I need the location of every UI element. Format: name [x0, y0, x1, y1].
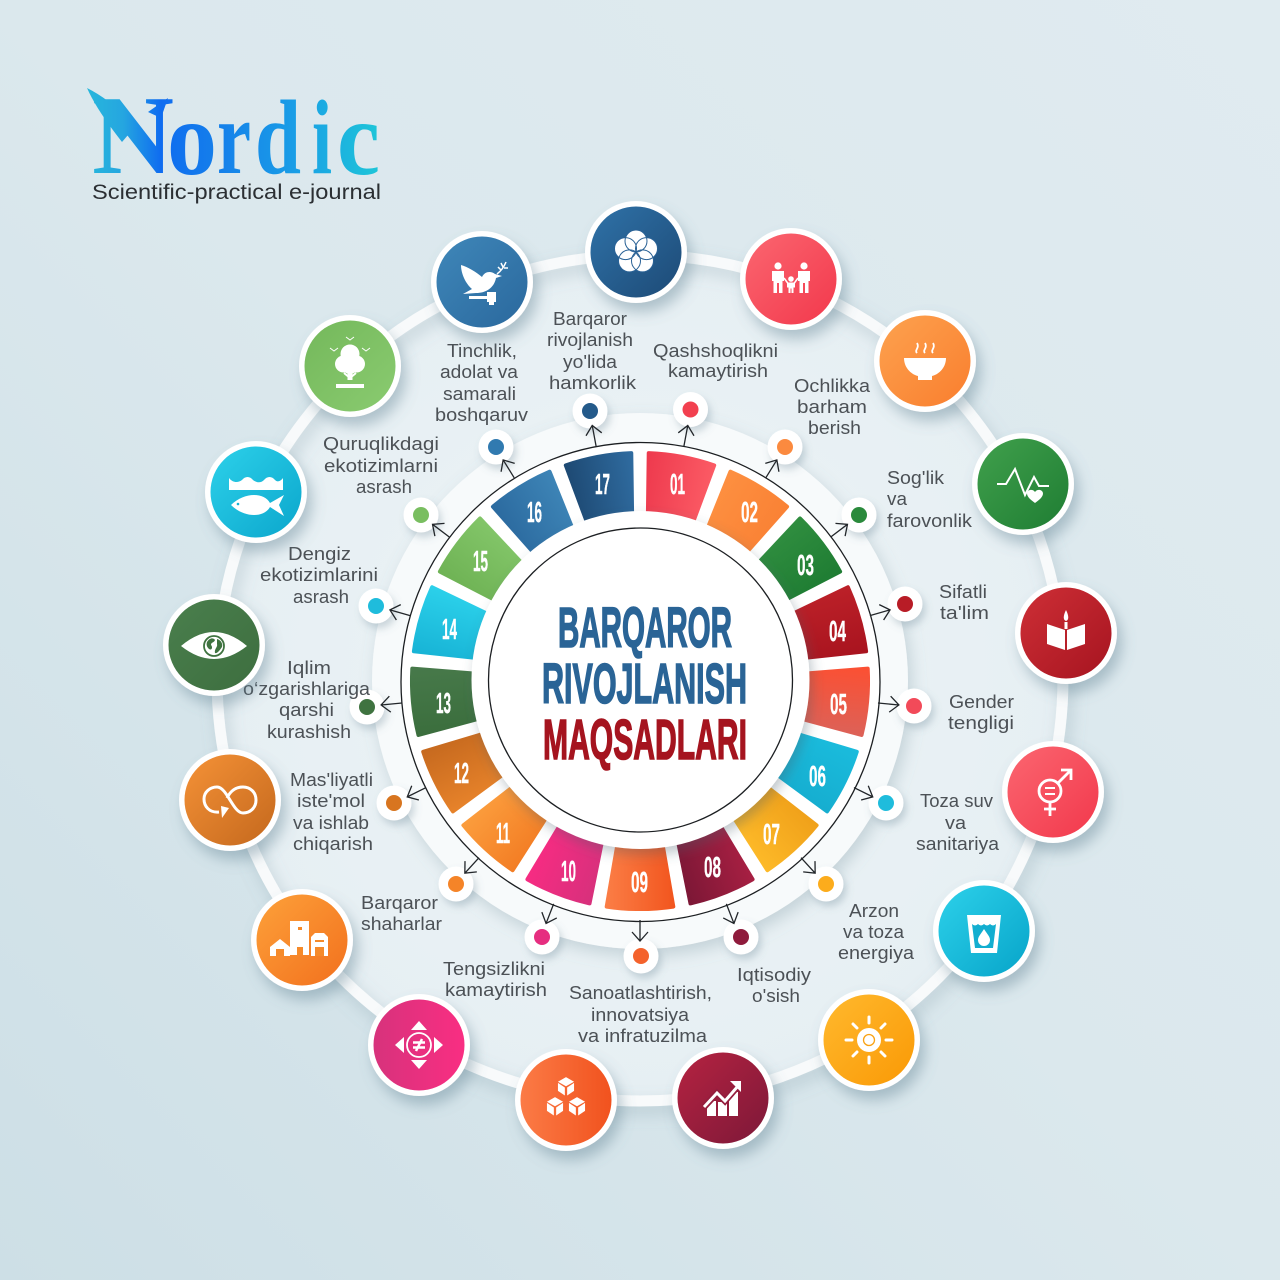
icon 02: bowl [874, 310, 976, 412]
label 15 [323, 434, 439, 497]
segment numbers: 16 [527, 497, 542, 529]
label 06: sanitariya [916, 834, 1000, 854]
segment numbers: 12 [454, 758, 469, 790]
label 03: farovonlik [887, 511, 973, 531]
label 10: kamaytirish [445, 980, 547, 1000]
label 05: Gender [949, 692, 1014, 712]
label 09: Sanoatlashtirish, [569, 983, 712, 1003]
center title: RIVOJLANISH [542, 652, 747, 716]
label 08: o'sish [752, 986, 800, 1006]
label 15: Quruqlikdagi [323, 434, 439, 454]
label 03: va [887, 489, 908, 509]
label 04 [939, 582, 989, 623]
label 17 [547, 309, 637, 393]
label 09: innovatsiya [591, 1005, 690, 1025]
label 01: kamaytirish [668, 361, 768, 381]
label 12: va ishlab [293, 813, 369, 833]
label 06: Toza suv [920, 791, 993, 811]
icon 16: dove and gavel [431, 231, 533, 333]
label 13 [243, 658, 371, 742]
icon 04: book and candle [1015, 582, 1117, 684]
icon 13: eye and globe [163, 594, 265, 696]
center title: MAQSADLARI [543, 708, 747, 772]
label 16: samarali [443, 384, 516, 404]
label 09: va infratuzilma [578, 1026, 708, 1046]
label 17: rivojlanish [547, 330, 633, 350]
label 13: kurashish [267, 722, 351, 742]
label 14 [260, 544, 378, 607]
icon 09: cubes [515, 1049, 617, 1151]
label 02: berish [808, 418, 861, 438]
label 16: adolat va [440, 362, 519, 382]
label 02: barham [797, 397, 867, 417]
label 14: Dengiz [288, 544, 351, 564]
logo wordmark: r [217, 79, 251, 196]
label 14: ekotizimlarini [260, 565, 378, 585]
thin outer circle [401, 442, 880, 922]
inner white band [372, 413, 908, 949]
segment numbers: 02 [741, 497, 758, 529]
label 11: shaharlar [361, 914, 442, 934]
icon 06: glass of water [933, 880, 1035, 982]
segment numbers: 07 [763, 819, 780, 851]
segment numbers: 13 [436, 688, 451, 720]
segment numbers: 11 [496, 818, 510, 850]
label 01 [653, 341, 778, 381]
label 17: Barqaror [553, 309, 627, 329]
label 05 [948, 692, 1014, 733]
segment numbers: 09 [631, 867, 648, 899]
label 10 [443, 959, 547, 1000]
segment numbers: 03 [797, 550, 814, 582]
segment numbers: 06 [809, 761, 826, 793]
label 17: hamkorlik [549, 373, 637, 393]
label 09 [569, 983, 712, 1046]
logo wordmark: c [337, 80, 380, 197]
arrows from wheel to dots [380, 424, 900, 941]
label 04: ta'lim [940, 603, 989, 623]
label 07: Arzon [849, 901, 899, 921]
label 05: tengligi [948, 713, 1014, 733]
segment numbers: 14 [442, 614, 457, 646]
label 10: Tengsizlikni [443, 959, 545, 979]
segment numbers: 04 [829, 616, 846, 648]
label 02 [794, 376, 871, 438]
logo: Nordic journal [87, 74, 381, 204]
label 13: o‘zgarishlariga [243, 679, 371, 699]
wheel of 17 goal segments [410, 451, 870, 909]
label 17: yo'lida [563, 352, 618, 372]
icon 10: reduced inequalities [368, 994, 470, 1096]
label 16: boshqaruv [435, 405, 528, 425]
label 06 [916, 791, 1000, 854]
label 14: asrash [293, 587, 349, 607]
outer ring connecting goal icons [217, 255, 1063, 1101]
label 16 [435, 341, 528, 425]
icon 12: infinity loop [179, 749, 281, 851]
segment numbers: 01 [670, 469, 685, 501]
label 11 [361, 893, 442, 934]
goal labels [243, 309, 1014, 1046]
label 12: Mas'liyatli [290, 770, 373, 790]
center title: BARQAROR [558, 596, 732, 660]
label 07: va toza [843, 922, 905, 942]
segment numbers [436, 469, 847, 899]
icon 14: fish under waves [205, 441, 307, 543]
segment numbers: 10 [561, 856, 576, 888]
label 01: Qashshoqlikni [653, 341, 778, 361]
segment numbers: 17 [595, 469, 610, 501]
label 08: Iqtisodiy [737, 965, 811, 985]
label 11: Barqaror [361, 893, 438, 913]
icon 07: sun with bulb [818, 989, 920, 1091]
icon 05: gender symbol [1002, 741, 1104, 843]
icon 15: tree on land [299, 315, 401, 417]
logo wordmark: o [167, 80, 217, 197]
icon 17: partnership flower [585, 201, 687, 303]
label 03: Sog'lik [887, 468, 945, 488]
label 03 [887, 468, 973, 531]
icon 03: pulse and heart [972, 433, 1074, 535]
segment numbers: 08 [704, 852, 721, 884]
label 07: energiya [838, 943, 915, 963]
logo wordmark: i [312, 79, 332, 196]
icon 11: buildings [251, 889, 353, 991]
label 12: iste'mol [297, 791, 365, 811]
label 12: chiqarish [293, 834, 373, 854]
label 15: asrash [356, 477, 412, 497]
logo wordmark: d [255, 79, 301, 196]
label 04: Sifatli [939, 582, 987, 602]
logo tagline: Scientific-practical e-journal [92, 181, 381, 204]
icon 08: growth chart [672, 1047, 774, 1149]
logo wordmark: N [92, 74, 174, 198]
label 15: ekotizimlarni [324, 456, 438, 476]
segment numbers: 15 [473, 546, 488, 578]
center disc [472, 511, 810, 849]
label 07 [838, 901, 915, 963]
segment numbers: 05 [830, 689, 847, 721]
small colored dots [350, 392, 932, 974]
label 02: Ochlikka [794, 376, 871, 396]
center title [542, 596, 747, 772]
label 16: Tinchlik, [447, 341, 517, 361]
icon 01: family [740, 228, 842, 330]
label 06: va [945, 813, 967, 833]
label 12 [290, 770, 373, 854]
logo wordmark [87, 74, 380, 198]
label 13: qarshi [279, 700, 334, 720]
label 13: Iqlim [287, 658, 331, 678]
label 08 [737, 965, 811, 1006]
